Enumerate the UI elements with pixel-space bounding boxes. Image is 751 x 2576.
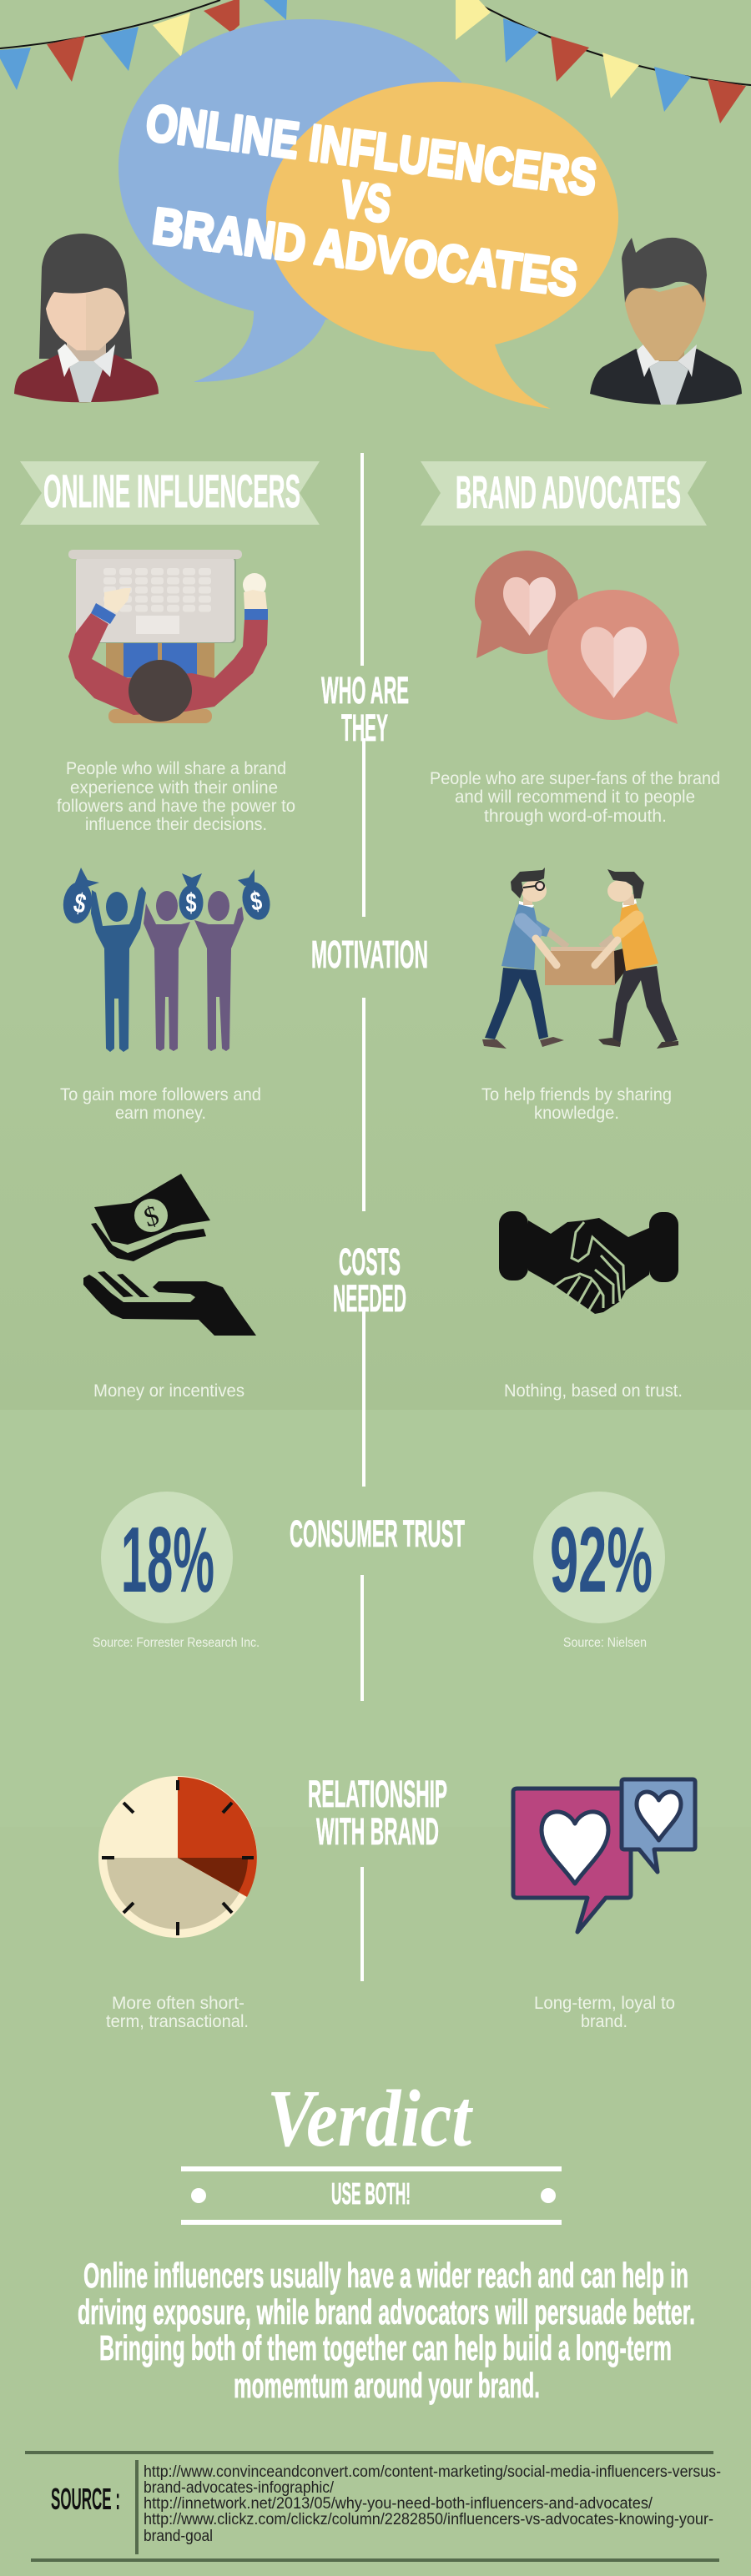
text: influencers relationship	[106, 1994, 249, 2031]
ribbon: brand advocates	[421, 461, 707, 526]
text: influencers motivation: To gain more followers and	[60, 1085, 261, 1104]
heading: relationship with brand: WITH BRAND	[316, 1810, 439, 1853]
title	[143, 93, 600, 307]
title: ONLINE INFLUENCERS	[143, 93, 600, 206]
text: influencers relationship: More often short-	[112, 1994, 244, 2013]
speech bubble: orange	[266, 82, 618, 409]
source: nielsen: Source: Nielsen	[563, 1636, 647, 1650]
text: influencers motivation	[60, 1085, 261, 1123]
text: verdict paragraph: momemtum around your brand.	[234, 2366, 540, 2405]
text: influencers description	[57, 759, 295, 834]
text: advocates description: through word-of-mouth.	[484, 807, 667, 826]
label: use both	[181, 2166, 562, 2225]
stat: 18 percent	[101, 1492, 233, 1623]
panel: who are they: WHO ARE	[321, 669, 409, 712]
text: advocates relationship	[534, 1994, 675, 2031]
ribbon: online influencers: ONLINE INFLUENCERS	[43, 465, 300, 517]
text: influencers description: experience with their online	[70, 778, 278, 797]
text: influencers cost: Money or incentives	[93, 1381, 244, 1401]
text: source links: http://www.convinceandconvert.com/content-marketing/social-media-influencers-versus-	[144, 2463, 721, 2481]
text: source links: http://innetwork.net/2013/05/why-you-need-both-influencers-and-advocates/	[144, 2495, 653, 2513]
stat: 92 percent: 92%	[550, 1508, 653, 1612]
panel: who are they	[57, 550, 720, 834]
text: advocates description: and will recommend it to people	[455, 787, 695, 807]
source: forrester: Source: Forrester Research Inc.	[93, 1636, 260, 1650]
panel: consumer trust	[93, 1492, 665, 1650]
panel: sources	[25, 2451, 721, 2562]
text: advocates description: People who are super-fans of the brand	[430, 769, 720, 788]
text: source links: http://www.clickz.com/clickz/column/2282850/influencers-vs-advocates-knowing-your-	[144, 2511, 713, 2528]
panel: verdict	[78, 2074, 695, 2405]
icon: person at laptop	[68, 550, 268, 723]
icon: clock	[98, 1776, 257, 1938]
text: influencers description: People who will share a brand	[66, 759, 286, 778]
text: advocates description	[430, 769, 720, 826]
panel: motivation	[60, 868, 678, 1123]
text: advocates motivation: To help friends by sharing	[481, 1085, 672, 1104]
heading: relationship with brand	[308, 1773, 447, 1853]
icon: money bag 1	[61, 868, 99, 925]
icon: hand receiving money	[83, 1174, 256, 1336]
stat: 92 percent	[533, 1492, 665, 1623]
panel: costs needed: NEEDED	[333, 1277, 406, 1320]
title: BRAND ADVOCATES	[149, 197, 581, 307]
panel: motivation: MOTIVATION	[311, 933, 428, 976]
icon: money bag 2	[179, 873, 204, 920]
bunting: right	[456, 0, 751, 123]
icon: money bag 2: $	[185, 888, 197, 918]
heading: costs needed	[333, 1240, 406, 1320]
text: influencers description: followers and have the power to	[57, 797, 295, 816]
text: influencers relationship: term, transactional.	[106, 2012, 249, 2031]
center divider line	[360, 453, 365, 1981]
heading: who are they	[321, 669, 409, 749]
text: influencers motivation: earn money.	[115, 1104, 206, 1123]
icon: heart speech bubbles	[475, 551, 679, 724]
text: source links	[144, 2463, 721, 2545]
icon: hand receiving money: $	[140, 1200, 163, 1234]
text: advocates motivation	[481, 1085, 672, 1123]
panel: consumer trust: CONSUMER TRUST	[290, 1512, 465, 1555]
ribbon: online influencers	[20, 461, 320, 525]
text: advocates motivation: knowledge.	[534, 1104, 619, 1123]
panel: relationship with brand	[98, 1773, 695, 2031]
heading: relationship with brand: RELATIONSHIP	[308, 1773, 447, 1815]
icon: handshake	[499, 1211, 678, 1314]
icon: money bag 1: $	[71, 887, 89, 919]
text: advocates relationship: brand.	[581, 2012, 628, 2031]
text: influencers description: influence their decisions.	[85, 815, 267, 834]
panel: sources: SOURCE :	[51, 2482, 120, 2516]
heading: costs needed: COSTS	[339, 1240, 401, 1283]
icon: figures with money bags	[61, 868, 274, 1052]
label: use both: USE BOTH!	[331, 2176, 411, 2211]
title: VS	[337, 170, 394, 234]
heading: who are they: THEY	[341, 707, 388, 749]
icon: man	[590, 238, 742, 405]
icon: woman	[14, 234, 159, 402]
bunting: left	[0, 0, 287, 90]
text: source links: brand-advocates-infographic/	[144, 2479, 335, 2497]
icon: loving chat bubbles	[513, 1779, 695, 1932]
panel: column headings	[20, 461, 707, 526]
text: advocates cost: Nothing, based on trust.	[504, 1381, 683, 1401]
text: source links: brand-goal	[144, 2528, 213, 2545]
icon: money bag 3: $	[248, 885, 265, 917]
icon: money bag 3	[238, 869, 274, 923]
stat: 18 percent: 18%	[121, 1508, 214, 1612]
panel: costs needed	[83, 1174, 683, 1401]
text: advocates relationship: Long-term, loyal to	[534, 1994, 675, 2013]
speech bubble: blue	[118, 19, 494, 382]
text: verdict paragraph	[78, 2256, 695, 2405]
header banner	[0, 0, 751, 409]
heading: verdict: Verdict	[267, 2074, 473, 2164]
icon: two friends with box	[482, 868, 678, 1049]
